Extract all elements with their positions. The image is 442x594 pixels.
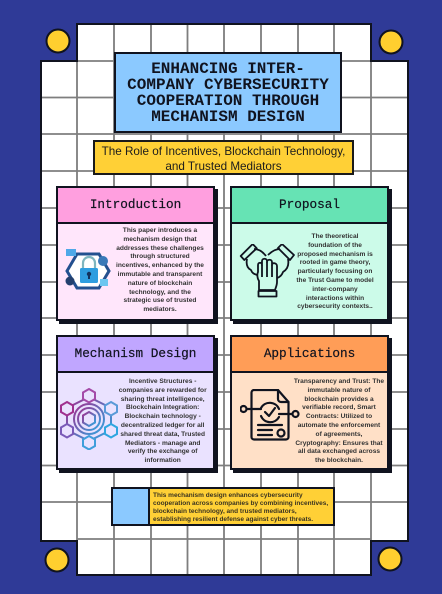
panel: mechanism design (56, 335, 215, 470)
text: mechanism design: verify the exchange of (128, 448, 198, 455)
text: applications: Transparency and Trust: The (294, 378, 384, 385)
text: applications: the blockchain. (315, 457, 363, 464)
title: COMPANY CYBERSECURITY (127, 76, 329, 94)
text: applications (294, 378, 384, 464)
text: proposal: the Trust Game to model (296, 277, 374, 284)
text: applications: blockchain provides a (304, 396, 374, 403)
text: introduction: strategic use of trusted (124, 297, 196, 304)
text: mechanism design: sharing threat intelligence, (121, 396, 205, 403)
panel: proposal (230, 186, 389, 321)
text: proposal: The theoretical (312, 233, 358, 240)
heading: proposal (232, 188, 387, 224)
heading: introduction (58, 188, 213, 224)
footer: conclusion text: cooperation across companies by combining incentives, (153, 500, 328, 507)
heading: introduction: Introduction (90, 197, 181, 212)
text: mechanism design: Blockchain technology - (125, 413, 201, 420)
text: applications: automate the enforcement (298, 422, 380, 429)
corner dot: bottom right (378, 546, 402, 572)
text: proposal: inter-company (312, 286, 358, 293)
text: mechanism design: Incentive Structures - (129, 378, 196, 385)
icon: verified document (240, 389, 300, 441)
text: introduction: addresses these challenges (116, 245, 204, 252)
heading: mechanism design (58, 337, 213, 373)
icon: padlock network (65, 249, 111, 290)
text: introduction: mechanism design that (123, 236, 197, 243)
text: introduction: technology, and the (129, 289, 191, 296)
text: introduction: immutable and transparent (118, 271, 202, 278)
title (114, 52, 342, 133)
footer: conclusion text: blockchain technology, and trusted mediators, (153, 508, 297, 515)
text: introduction (116, 227, 204, 313)
footer: conclusion text: This mechanism design enhances cybersecurity (153, 492, 303, 498)
text: mechanism design: Blockchain Integration: (126, 404, 199, 411)
text: mechanism design (119, 378, 207, 464)
text: proposal: particularly focusing on (298, 268, 372, 275)
text: applications: immutable nature of (307, 387, 370, 394)
text: introduction: mediators. (143, 306, 177, 313)
subtitle: and Trusted Mediators (165, 160, 282, 172)
text: applications: of agreements, (316, 431, 362, 438)
text: proposal: cybersecurity contexts.. (297, 303, 373, 310)
heading: mechanism design: Mechanism Design (75, 346, 196, 361)
text: mechanism design: shared threat data, Trusted (120, 431, 205, 438)
text: proposal: rooted in game theory, (300, 259, 370, 266)
footer: conclusion text (148, 487, 335, 526)
heading: proposal: Proposal (279, 197, 340, 212)
text: proposal: interactions within (306, 295, 364, 302)
text: applications: Cryptography: Ensures that (295, 440, 383, 447)
corner dot: top right (378, 30, 404, 54)
text: proposal (296, 233, 374, 310)
text: applications: all data exchanged across (298, 448, 380, 455)
title: ENHANCING INTER- (151, 60, 305, 78)
text: introduction: through structured (130, 253, 190, 260)
icon: joined hands (240, 244, 295, 298)
text: proposal: proposed mechanism is (297, 251, 373, 258)
corner dot: bottom left (44, 548, 70, 572)
panel: applications (230, 335, 389, 470)
text: mechanism design: information (145, 457, 181, 464)
text: introduction: incentives, enhanced by the (116, 262, 204, 269)
subtitle (93, 140, 354, 175)
text: mechanism design: companies are rewarded for (119, 387, 207, 394)
text: introduction: This paper introduces a (123, 227, 197, 234)
heading: applications (232, 337, 387, 373)
heading: applications: Applications (264, 346, 355, 361)
corner dot: top left (46, 28, 70, 54)
panel: introduction (56, 186, 215, 321)
text: mechanism design: decentralized ledger for all (121, 422, 204, 429)
text: applications: verifiable record, Smart (302, 404, 376, 411)
text: proposal: foundation of the (308, 242, 362, 249)
subtitle: The Role of Incentives, Blockchain Technology, (102, 144, 345, 158)
icon: hexagonal network (60, 388, 118, 450)
text: mechanism design: Mediators - manage and (125, 440, 200, 447)
footer: conclusion text: establishing resilient defense against cyber threats. (153, 516, 313, 523)
text: introduction: nature of blockchain (128, 280, 192, 287)
text: applications: Contracts: Utilized to (306, 413, 372, 420)
footer: colour block (111, 487, 150, 526)
title: MECHANISM DESIGN (151, 108, 305, 126)
title: COOPERATION THROUGH (137, 92, 319, 110)
